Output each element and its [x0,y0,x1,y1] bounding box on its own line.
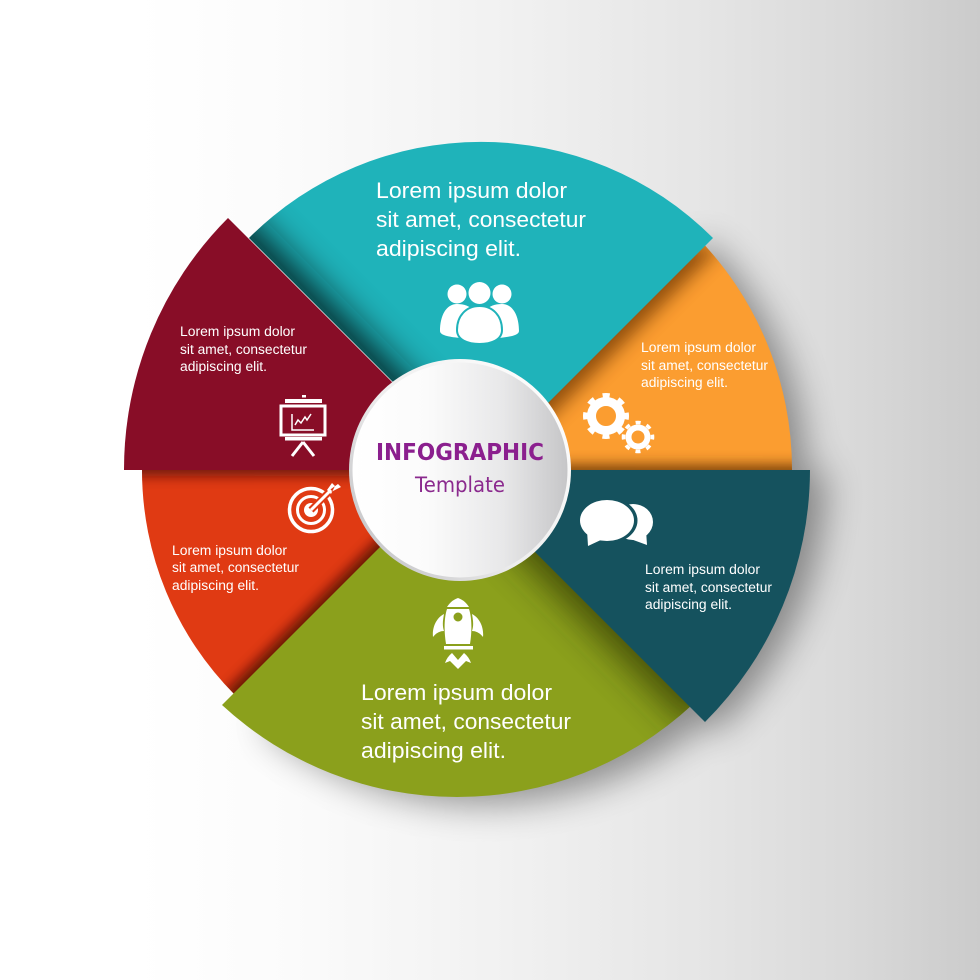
icon: speech bubbles [578,498,653,546]
text: teal sector [376,178,586,261]
icon: people [440,282,519,344]
icon: gears [586,396,652,452]
center circle [349,359,571,581]
text: red sector: Lorem ipsum dolor [172,543,288,558]
text: red sector: adipiscing elit. [172,578,259,593]
text: green sector [361,680,571,763]
panel: teal sector [249,142,713,403]
panel: orange sector [548,246,792,470]
text: red sector [172,543,300,593]
panel: crimson sector [124,218,480,470]
text: orange sector [641,340,769,390]
icon: rocket [433,598,483,669]
icon: presentation board [281,395,325,456]
text: orange sector: sit amet, consectetur [641,358,769,373]
outer wheel shadow [262,240,826,804]
title: INFOGRAPHIC [376,440,544,466]
text: red sector: sit amet, consectetur [172,560,300,575]
panel: red sector [142,470,380,694]
text: teal sector: Lorem ipsum dolor [376,178,567,203]
text: dark teal sector: sit amet, consectetur [645,580,773,595]
text: crimson sector: sit amet, consectetur [180,342,308,357]
text: crimson sector: adipiscing elit. [180,359,267,374]
text: green sector: Lorem ipsum dolor [361,680,552,705]
text: orange sector: Lorem ipsum dolor [641,340,757,355]
text: dark teal sector: Lorem ipsum dolor [645,562,761,577]
subtitle: Template [414,473,505,497]
text: crimson sector [180,324,308,374]
text: teal sector: adipiscing elit. [376,236,521,261]
panel: green sector [222,547,690,797]
icon: target [290,483,341,532]
text: dark teal sector [645,562,773,612]
text: crimson sector: Lorem ipsum dolor [180,324,296,339]
text: green sector: sit amet, consectetur [361,709,571,734]
text: dark teal sector: adipiscing elit. [645,597,732,612]
text: teal sector: sit amet, consectetur [376,207,586,232]
text: green sector: adipiscing elit. [361,738,506,763]
text: orange sector: adipiscing elit. [641,375,728,390]
panel: dark teal sector [453,470,810,722]
